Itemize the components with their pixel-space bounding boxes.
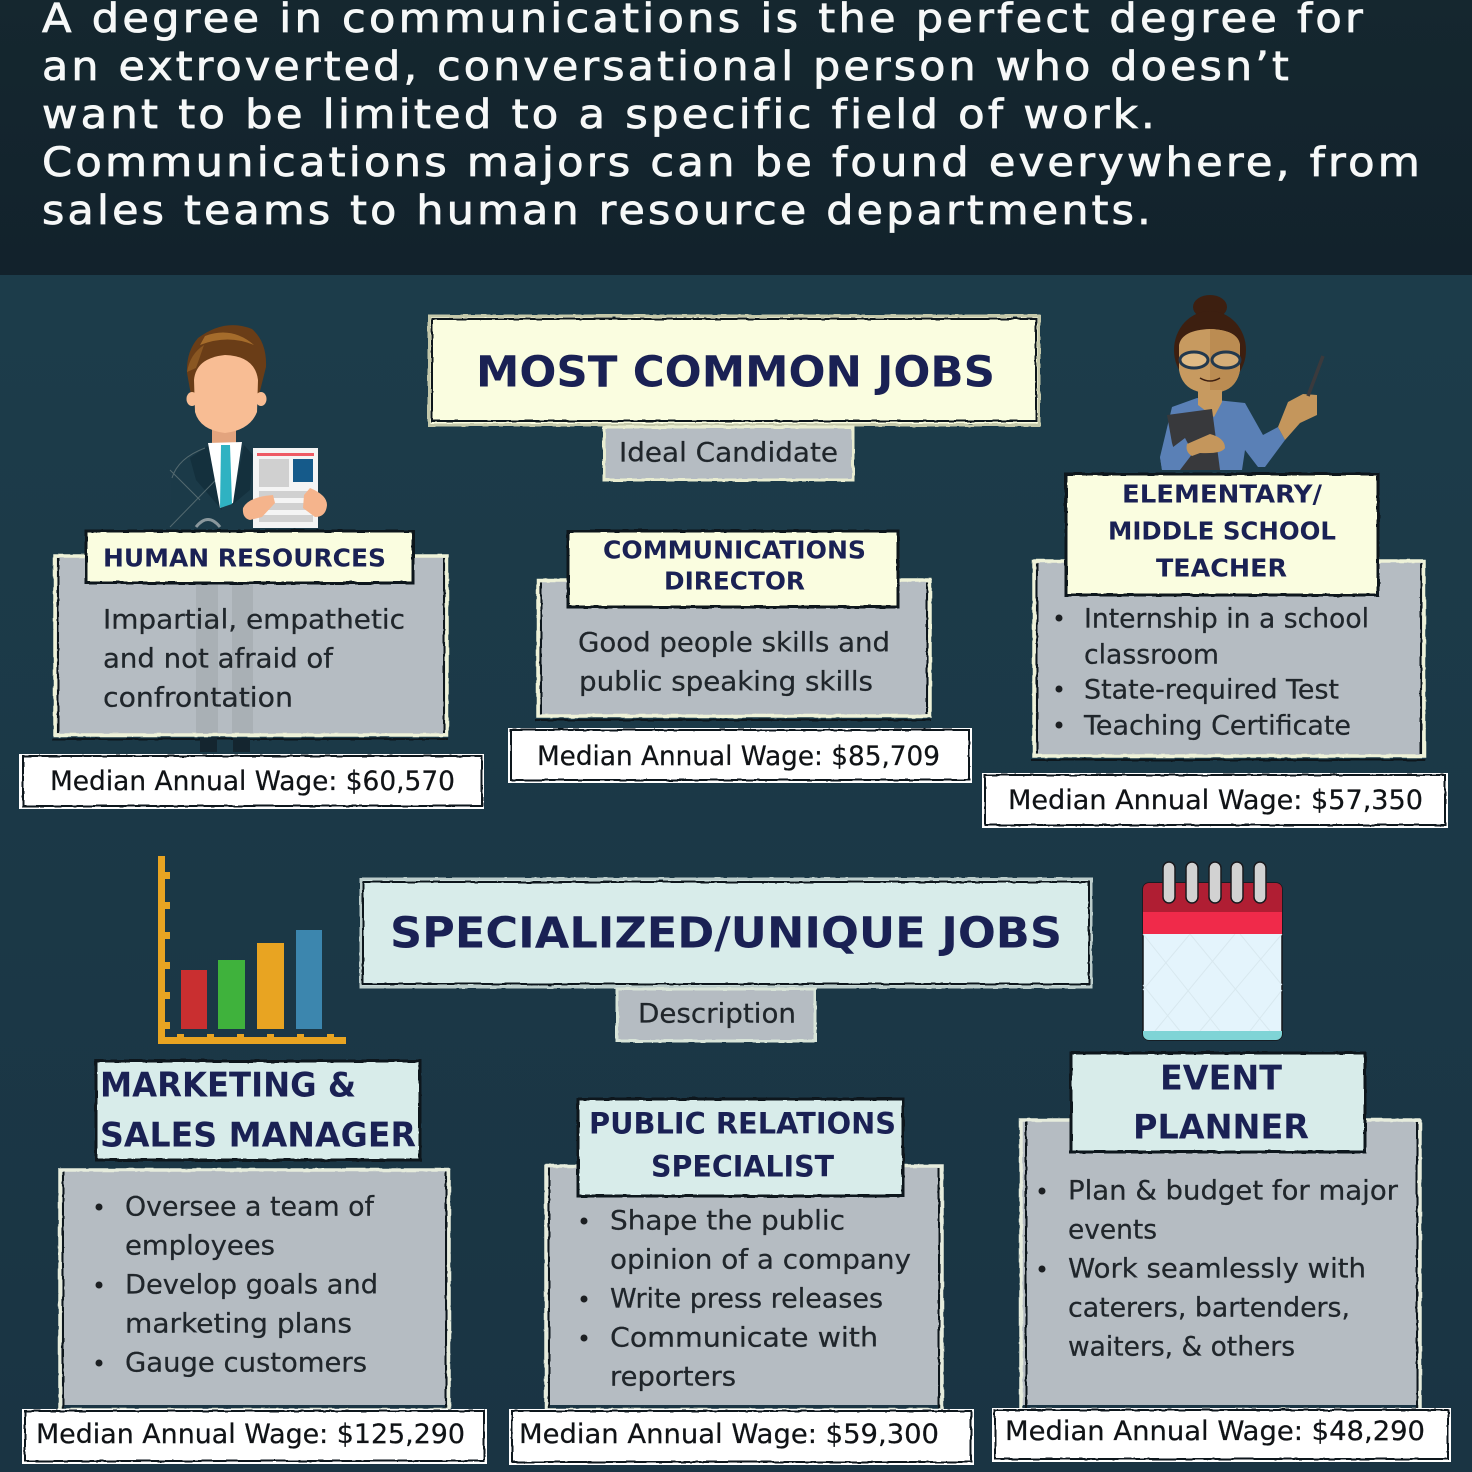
panel: teacher: Teaching Certificate [1083, 710, 1351, 742]
panel: teacher [1031, 474, 1425, 760]
wage: public relations specialist: Median Annual Wage: $59,300 [519, 1419, 939, 1450]
man's legs seen through panel [196, 584, 253, 734]
label: teacher: ELEMENTARY/ [1122, 480, 1323, 508]
panel: marketing and sales manager: Develop goals and [125, 1270, 378, 1300]
panel: event planner [1021, 1053, 1420, 1410]
intro header band: Communications majors can be found everywhere, from [42, 140, 1423, 186]
label: marketing and sales manager: MARKETING & [100, 1066, 356, 1106]
icon: calendar [1143, 862, 1282, 1040]
label: public relations specialist [578, 1099, 903, 1196]
wage: human resources: Median Annual Wage: $60,570 [50, 766, 455, 797]
panel: public relations specialist: opinion of a company [610, 1244, 911, 1276]
heading: specialized/unique jobs [361, 879, 1091, 987]
panel: human resources: Impartial, empathetic [103, 604, 405, 636]
panel: marketing and sales manager: employees [125, 1230, 275, 1262]
panel: human resources: confrontation [103, 682, 293, 714]
panel: teacher: classroom [1084, 640, 1219, 670]
icon: businessman holding document [170, 325, 327, 530]
intro header band: sales teams to human resource departments. [42, 188, 1154, 234]
heading: most common jobs [429, 316, 1039, 425]
panel: communications director [535, 531, 931, 720]
wage: public relations specialist [509, 1409, 974, 1465]
panel: teacher: State-required Test [1084, 674, 1339, 706]
wage: teacher [982, 773, 1448, 828]
label: event planner [1071, 1053, 1365, 1152]
panel: public relations specialist: reporters [610, 1362, 736, 1392]
panel: communications director: Good people skills and [578, 628, 890, 658]
panel: public relations specialist [546, 1099, 942, 1410]
panel: public relations specialist: Shape the public [610, 1206, 845, 1236]
intro header band [0, 0, 1472, 275]
subheading: ideal candidate [604, 427, 853, 480]
panel: teacher: Internship in a school [1084, 604, 1369, 634]
wage: human resources [19, 754, 484, 809]
panel: communications director: public speaking skills [579, 666, 873, 698]
panel: event planner: caterers, bartenders, [1068, 1292, 1350, 1324]
panel: marketing and sales manager [60, 1170, 449, 1410]
intro header band: an extroverted, conversational person who doesn’t [42, 44, 1292, 90]
subheading: description: Description [638, 998, 796, 1030]
label: communications director: COMMUNICATIONS [603, 536, 866, 564]
panel: event planner: Plan & budget for major [1068, 1176, 1399, 1206]
icon: bar chart [158, 856, 346, 1044]
wage: event planner [992, 1408, 1451, 1462]
subheading: description [617, 989, 815, 1041]
label: human resources [86, 531, 413, 583]
wage: event planner: Median Annual Wage: $48,290 [1005, 1416, 1425, 1447]
label: public relations specialist: SPECIALIST [651, 1150, 834, 1184]
panel: human resources: and not afraid of [103, 644, 335, 674]
label: event planner: EVENT [1160, 1058, 1283, 1098]
panel: human resources [52, 531, 448, 752]
label: public relations specialist: PUBLIC RELATIONS [589, 1106, 896, 1140]
label: teacher: TEACHER [1156, 554, 1287, 582]
wage: marketing and sales manager: Median Annual Wage: $125,290 [36, 1419, 465, 1450]
label: marketing and sales manager: SALES MANAGER [100, 1116, 416, 1156]
label: human resources: HUMAN RESOURCES [103, 544, 386, 572]
icon: teacher with pointer [1160, 295, 1323, 470]
intro header band: want to be limited to a specific field of work. [42, 92, 1158, 138]
label: event planner: PLANNER [1133, 1108, 1309, 1148]
wage: communications director [508, 728, 972, 783]
panel: public relations specialist: Communicate with [610, 1322, 878, 1354]
panel: marketing and sales manager: marketing plans [125, 1308, 352, 1340]
wage: teacher: Median Annual Wage: $57,350 [1008, 785, 1423, 816]
heading: most common jobs: MOST COMMON JOBS [476, 348, 995, 398]
heading: specialized/unique jobs: SPECIALIZED/UNIQUE JOBS [390, 908, 1062, 958]
panel: event planner: waiters, & others [1068, 1332, 1295, 1362]
panel: marketing and sales manager: Oversee a team of [125, 1192, 375, 1222]
wage: marketing and sales manager [22, 1409, 487, 1464]
label: teacher [1066, 474, 1378, 595]
label: communications director: DIRECTOR [664, 566, 805, 596]
label: communications director [568, 531, 898, 607]
label: marketing and sales manager [96, 1061, 420, 1160]
label: teacher: MIDDLE SCHOOL [1108, 516, 1336, 546]
panel: event planner: events [1068, 1214, 1157, 1246]
panel: public relations specialist: Write press releases [610, 1284, 883, 1314]
wage: communications director: Median Annual Wage: $85,709 [537, 741, 940, 772]
panel: marketing and sales manager: Gauge customers [125, 1348, 367, 1378]
panel: event planner: Work seamlessly with [1068, 1254, 1366, 1284]
subheading: ideal candidate: Ideal Candidate [619, 438, 838, 468]
